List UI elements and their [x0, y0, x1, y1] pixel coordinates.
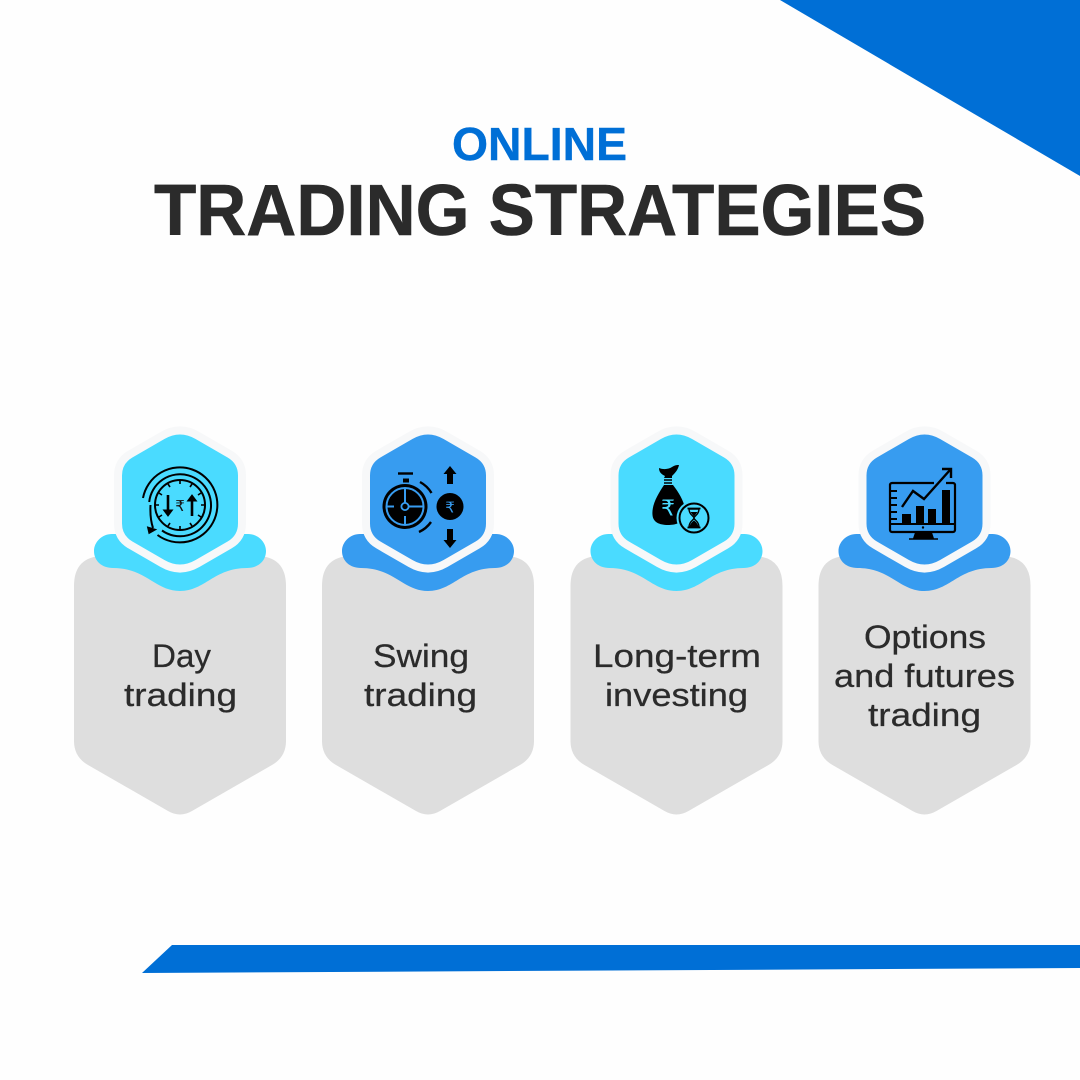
card body: [322, 556, 534, 814]
label: trading: [868, 697, 981, 733]
icon: stopwatch and rupee coin with arrows: [382, 466, 464, 548]
label: [364, 638, 477, 713]
panel: long-term investing: [570, 434, 782, 814]
label: Day: [152, 638, 211, 674]
panel: options and futures trading: [818, 434, 1030, 814]
hexagon: [866, 434, 982, 564]
label: Swing: [373, 638, 469, 674]
label: trading: [124, 677, 237, 713]
card body: [74, 556, 286, 814]
wave accent: [94, 534, 266, 591]
heading: trading strategies: TRADING STRATEGIES: [154, 171, 926, 251]
heading: online: ONLINE: [452, 118, 627, 170]
card body: [570, 556, 782, 814]
icon: money bag and hourglass: [652, 465, 712, 536]
top right triangle: [780, 0, 1080, 176]
hexagon: [122, 434, 238, 564]
label: and futures: [834, 658, 1015, 694]
label: [593, 638, 761, 713]
card body: [818, 556, 1030, 814]
label: [834, 619, 1015, 733]
label: trading: [364, 677, 477, 713]
hexagon: [618, 434, 734, 564]
panel: swing trading: [322, 434, 534, 814]
icon: money bag and hourglass: ₹: [661, 496, 675, 522]
label: investing: [605, 677, 748, 713]
hexagon: [370, 434, 486, 564]
panel: day trading: [74, 434, 286, 814]
label: Long-term: [593, 638, 761, 674]
label: Options: [864, 619, 986, 655]
wave accent: [590, 534, 762, 591]
title: [154, 118, 926, 251]
label: [124, 638, 237, 713]
icon: clock with rupee and arrows: ₹: [175, 497, 185, 515]
icon: stopwatch and rupee coin with arrows: ₹: [445, 498, 455, 516]
wave accent: [838, 534, 1010, 591]
bottom blue bar: [142, 945, 1080, 973]
icon: monitor with rising chart: [890, 469, 955, 539]
icon: clock with rupee and arrows: [143, 467, 217, 542]
wave accent: [342, 534, 514, 591]
